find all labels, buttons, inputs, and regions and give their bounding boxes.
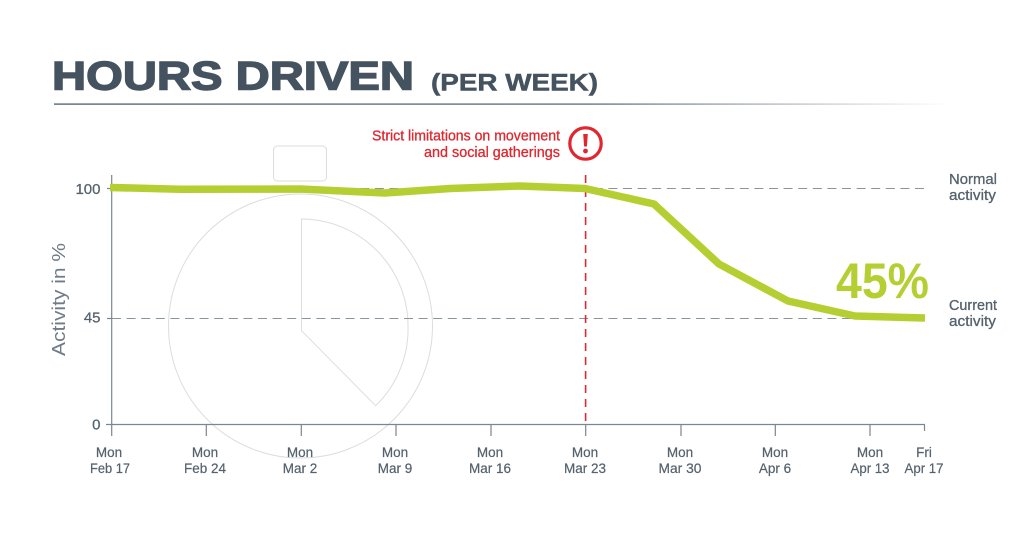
label: current activity: Current: [949, 298, 997, 314]
x-axis labels: Mar 9: [378, 461, 412, 476]
value callout: 45%: 45%: [836, 253, 929, 309]
x-axis labels: Mon: [572, 445, 598, 460]
watermark stopwatch icon: [168, 146, 432, 458]
x-axis labels: Mar 30: [658, 461, 702, 476]
reference dashed lines: [112, 188, 925, 318]
event marker dashed line: [585, 175, 587, 424]
activity line: [110, 186, 925, 318]
callout: strict limitations: Strict limitations on movement: [372, 127, 561, 144]
x-axis labels: Mon: [192, 445, 218, 460]
title: [52, 55, 598, 99]
x-axis labels: Mon: [667, 445, 693, 460]
x-axis labels: Apr 17: [904, 461, 944, 476]
label: current activity: [949, 298, 997, 330]
callout: strict limitations: [372, 127, 561, 161]
icon: exclamation alert: [570, 128, 601, 159]
label: normal activity: Normal: [949, 172, 997, 188]
x-axis labels: Apr 6: [759, 461, 791, 476]
callout: strict limitations: and social gatherings: [424, 144, 560, 161]
y-axis labels: [75, 181, 100, 434]
label: normal activity: activity: [949, 188, 997, 204]
axes: [106, 175, 925, 436]
x-axis labels: Mon: [477, 445, 503, 460]
x-axis labels: Mar 16: [469, 461, 511, 476]
x-axis labels: Mon: [857, 445, 883, 460]
x-axis labels: [90, 445, 944, 476]
x-axis labels: Mon: [287, 445, 313, 460]
y-axis title: Activity in %: [49, 243, 69, 356]
title: HOURS DRIVEN: [52, 55, 414, 99]
x-axis labels: Mon: [762, 445, 788, 460]
x-axis labels: Mar 23: [564, 461, 606, 476]
x-axis labels: Feb 17: [90, 461, 130, 476]
y-axis labels: 100: [75, 181, 100, 198]
title: (PER WEEK): [431, 69, 598, 96]
label: current activity: activity: [949, 314, 997, 330]
title rule: [54, 103, 950, 105]
x-axis labels: Feb 24: [184, 461, 226, 476]
y-axis labels: 45: [84, 310, 100, 326]
label: normal activity: [949, 172, 997, 204]
x-axis labels: Mon: [96, 445, 122, 460]
x-axis labels: Mar 2: [283, 461, 317, 476]
x-axis labels: Apr 13: [850, 461, 890, 476]
y-axis labels: 0: [92, 416, 100, 434]
x-axis labels: Fri: [916, 445, 932, 460]
x-axis labels: Mon: [382, 445, 408, 460]
